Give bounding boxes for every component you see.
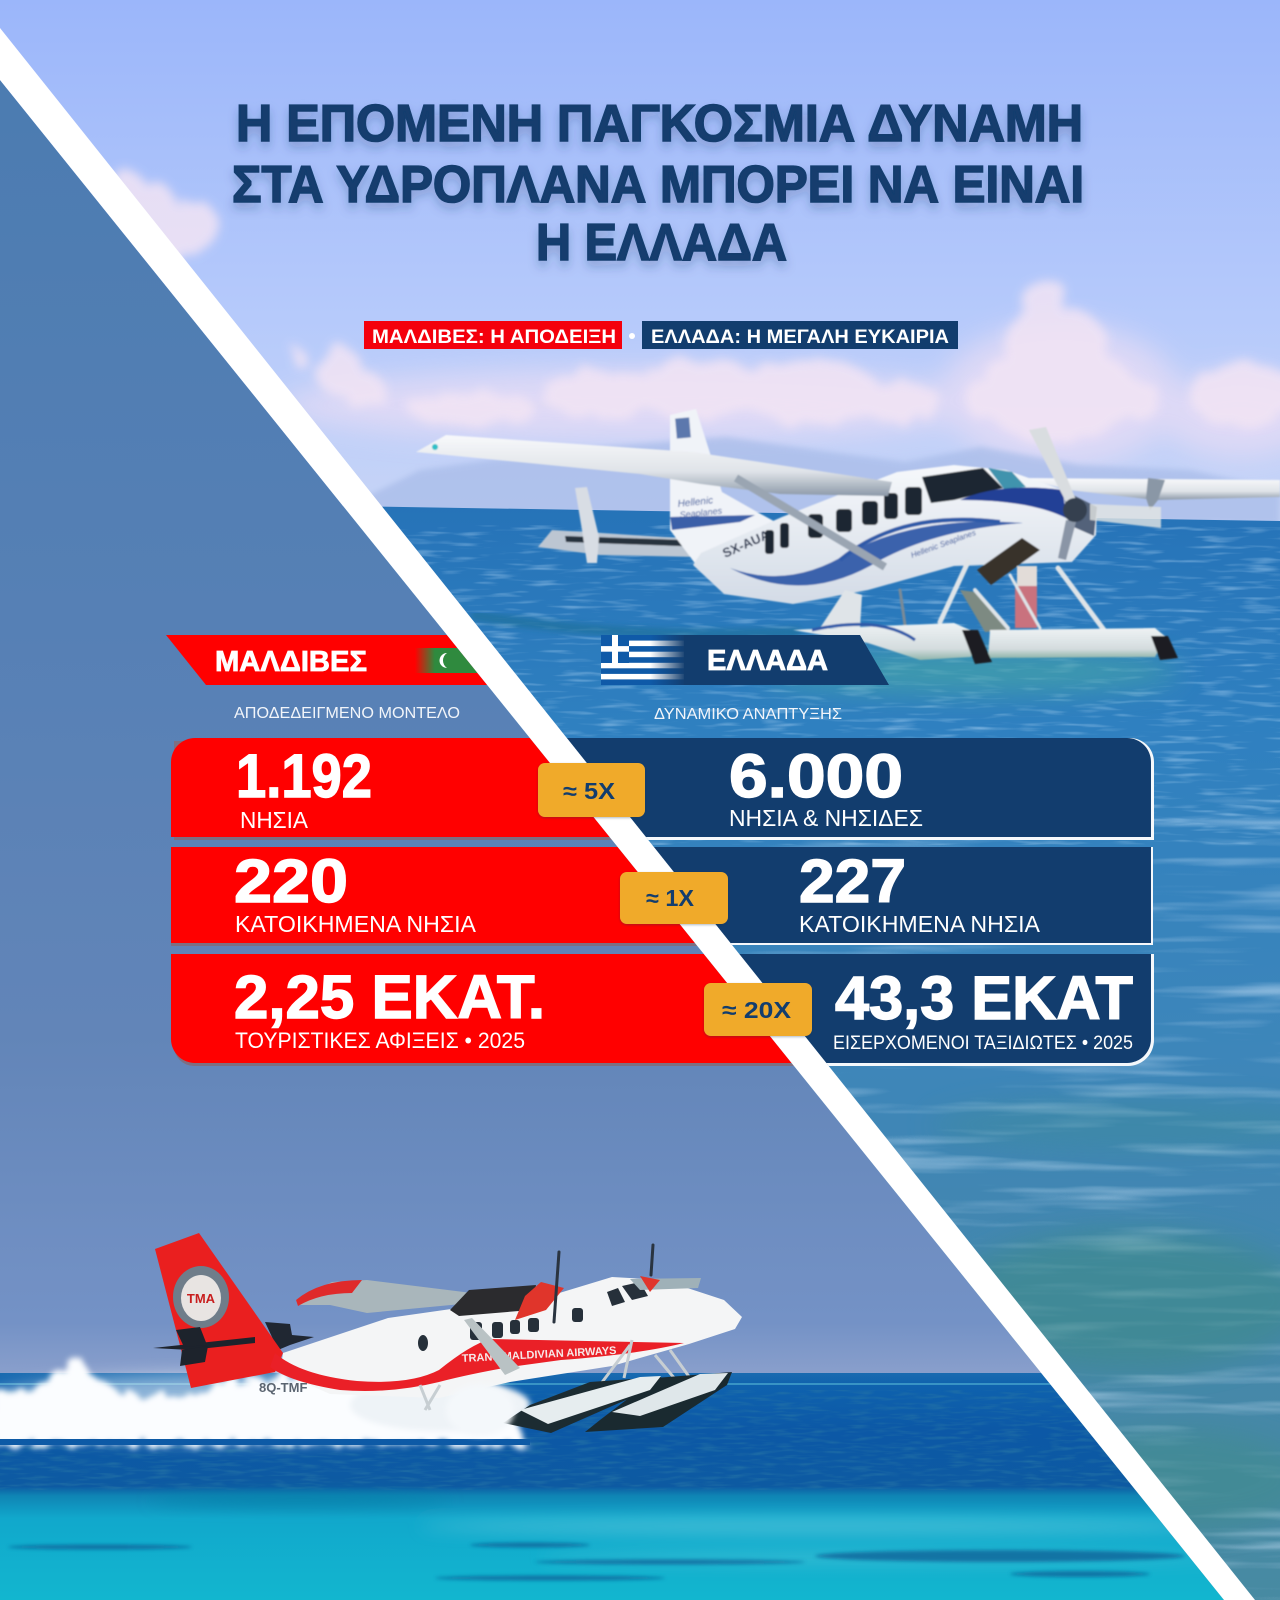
dark exhaust panel: [977, 538, 1040, 585]
tag: Greece opportunity: [642, 321, 958, 349]
belly mist: [350, 1379, 530, 1431]
fuselage: SX-AUA: [720, 527, 772, 561]
wing: [296, 1280, 472, 1313]
Greece islands stat: ΝΗΣΙΑ & ΝΗΣΙΔΕΣ: [729, 805, 923, 831]
tail fin: Hellenic: [677, 495, 714, 510]
badge: approx 5X: [538, 763, 645, 817]
Maldives arrivals stat: 2,25 ΕΚΑΤ.: [234, 963, 545, 1031]
title: Η ΕΛΛΑΔΑ: [536, 214, 787, 272]
blue livery swooshes: [730, 522, 1023, 586]
distant mountains: [340, 437, 1280, 525]
ribbon: Greece: [601, 635, 889, 685]
comparison panel: rows, ribbons and sublabels: [166, 635, 1154, 1066]
Greece islands stat: [729, 742, 923, 831]
Greece arrivals stat: 43,3 ΕΚΑΤ: [835, 964, 1133, 1032]
red engine cowl: [515, 1282, 564, 1320]
person on float: [1015, 566, 1037, 628]
tag: Maldives proof: ΜΑΛΔΙΒΕΣ: Η ΑΠΟΔΕΙΞΗ: [372, 327, 616, 348]
tag: Greece opportunity: ΕΛΛΑΔΑ: Η ΜΕΓΑΛΗ ΕΥΚΑΙΡΙΑ: [651, 327, 949, 348]
float struts: [420, 1340, 690, 1410]
far strut and right wing: [1023, 478, 1280, 500]
photo: red Twin Otter seaplane with spray: [0, 1233, 742, 1445]
near and far floats: [446, 1372, 732, 1436]
ribbon: Maldives: [166, 635, 487, 685]
waterline: [0, 1439, 530, 1445]
badge: approx 20X: [704, 983, 812, 1036]
near float: [793, 623, 977, 660]
blue nose: [960, 488, 1066, 518]
Maldives inhabited stat: 220: [234, 847, 348, 915]
Greece arrivals stat: ΕΙΣΕΡΧΟΜΕΝΟΙ ΤΑΞΙΔΙΩΤΕΣ • 2025: [833, 1033, 1133, 1054]
main wing: [416, 435, 892, 496]
windshield: [922, 468, 1003, 503]
windows: [418, 1282, 648, 1351]
Maldives inhabited stat: ΚΑΤΟΙΚΗΜΕΝΑ ΝΗΣΙΑ: [235, 911, 477, 937]
red cheatline: [270, 1339, 684, 1391]
subtitle tags: [364, 321, 958, 349]
badge: approx 20X: ≈ 20X: [722, 997, 792, 1023]
badge: approx 1X: ≈ 1X: [646, 885, 695, 911]
photo: red Twin Otter seaplane with spray: TRANS MALDIVIAN AIRWAYS: [462, 1345, 617, 1365]
horizontal stabiliser: [538, 487, 713, 563]
sea: Greece: [340, 506, 1280, 1600]
tail fin: Seaplanes: [679, 506, 723, 520]
tail fin: [670, 409, 790, 570]
title: [232, 95, 1084, 272]
title: ΣΤΑ ΥΔΡΟΠΛΑΝΑ ΜΠΟΡΕΙ ΝΑ ΕΙΝΑΙ: [232, 156, 1084, 214]
row 2: inhabited islands: [234, 847, 1041, 937]
windows: [765, 487, 922, 554]
row 3: visitors: [234, 963, 1133, 1054]
far engine: [630, 1276, 701, 1292]
title: Η ΕΠΟΜΕΝΗ ΠΑΓΚΟΣΜΙΑ ΔΥΝΑΜΗ: [236, 95, 1083, 153]
badge: approx 1X: [620, 872, 728, 924]
Maldives islands stat: [236, 742, 372, 833]
airline logo: [173, 1266, 229, 1328]
label: Maldives heading: ΜΑΛΔΙΒΕΣ: [215, 646, 367, 678]
bullet separator: [629, 333, 635, 339]
icon: Maldives flag: [416, 648, 478, 673]
sublabel: proven model: ΑΠΟΔΕΔΕΙΓΜΕΝΟ ΜΟΝΤΕΛΟ: [234, 705, 460, 722]
badge: approx 5X: ≈ 5X: [563, 778, 616, 804]
photo: red Twin Otter seaplane with spray: 8Q-TMF: [259, 1380, 307, 1395]
Maldives islands stat: ΝΗΣΙΑ: [240, 807, 309, 833]
water spray mist: [0, 1374, 500, 1442]
far tail stabiliser: [265, 1322, 314, 1350]
propellers: [554, 1245, 653, 1322]
water spray: [0, 1352, 525, 1444]
Maldives rows in red: [166, 635, 794, 1066]
Maldives inhabited stat: [234, 847, 477, 937]
photo: Greek Cessna seaplane on floats: [416, 409, 1280, 664]
Greece inhabited stat: ΚΑΤΟΙΚΗΜΕΝΑ ΝΗΣΙΑ: [799, 911, 1041, 937]
far float: [988, 628, 1166, 658]
red tail fin: [155, 1233, 283, 1388]
row 1: islands: [236, 742, 923, 833]
fuselage: Hellenic Seaplanes: [910, 528, 977, 560]
float ends: [962, 630, 992, 664]
label: Greece heading: ΕΛΛΑΔΑ: [707, 645, 828, 677]
Greece inhabited stat: 227: [799, 847, 906, 915]
airline logo: TMA: [187, 1291, 216, 1306]
Maldives islands stat: 1.192: [236, 742, 372, 810]
sea: Maldives: [0, 1373, 1280, 1600]
wing strut: [736, 478, 885, 567]
sublabel: growth potential: ΔΥΝΑΜΙΚΟ ΑΝΑΠΤΥΞΗΣ: [654, 706, 842, 723]
tailplane: [153, 1327, 255, 1366]
fuselage: [280, 1277, 742, 1398]
struts: [820, 562, 1104, 632]
Maldives arrivals stat: ΤΟΥΡΙΣΤΙΚΕΣ ΑΦΙΞΕΙΣ • 2025: [235, 1028, 525, 1053]
Greece inhabited stat: [799, 847, 1041, 937]
wing strut: [464, 1318, 520, 1375]
propeller: [1029, 427, 1161, 560]
Greek rows in navy: [520, 738, 1154, 1066]
fuselage: [693, 465, 1097, 604]
dark nacelle: [450, 1285, 536, 1316]
Greece islands stat: 6.000: [729, 742, 903, 810]
icon: Greek flag: [601, 635, 686, 685]
clouds over Greece: [116, 172, 1280, 465]
tag: Maldives proof: [364, 321, 622, 349]
